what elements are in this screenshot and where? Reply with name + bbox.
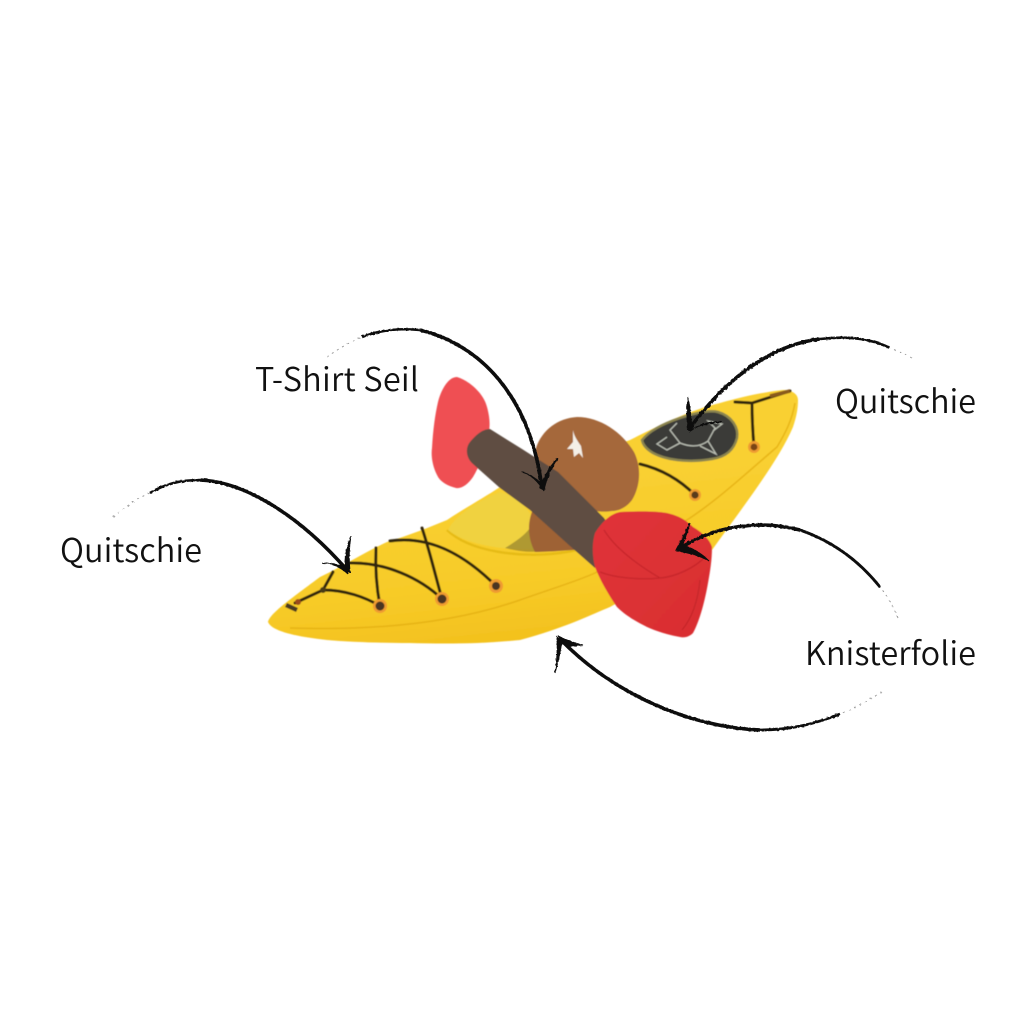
lace eyelets bbox=[286, 391, 790, 613]
hull seam bbox=[290, 403, 795, 629]
small paddle blade bbox=[432, 377, 490, 488]
dog logo on head bbox=[567, 430, 583, 458]
cockpit opening bbox=[448, 492, 552, 549]
lower body of figure bbox=[529, 505, 600, 552]
hatch emblem bbox=[657, 421, 722, 454]
coaming rim bbox=[447, 530, 596, 555]
label: T-Shirt Seil: T-Shirt Seil bbox=[255, 354, 419, 401]
large paddle blade bbox=[593, 511, 712, 637]
label: Quitschie left: Quitschie bbox=[60, 525, 202, 572]
cockpit shadow bbox=[505, 528, 542, 552]
large paddle fold bbox=[600, 530, 706, 630]
hatch cover bbox=[642, 411, 737, 461]
arrow: Knisterfolie to hull bbox=[555, 636, 882, 730]
kayak laces bbox=[295, 391, 790, 606]
label: Quitschie right: Quitschie bbox=[835, 376, 976, 423]
arrow: right Quitschie bbox=[687, 338, 912, 432]
kayak hull bbox=[268, 390, 798, 644]
arrow: left Quitschie bbox=[113, 480, 351, 574]
figure head bbox=[534, 417, 639, 512]
label: Knisterfolie: Knisterfolie bbox=[805, 628, 976, 675]
arrow: Knisterfolie to paddle bbox=[676, 523, 898, 618]
arrow: T-Shirt Seil bbox=[327, 329, 558, 491]
paddle shaft bbox=[467, 429, 612, 568]
toy kayak illustration bbox=[268, 377, 798, 644]
